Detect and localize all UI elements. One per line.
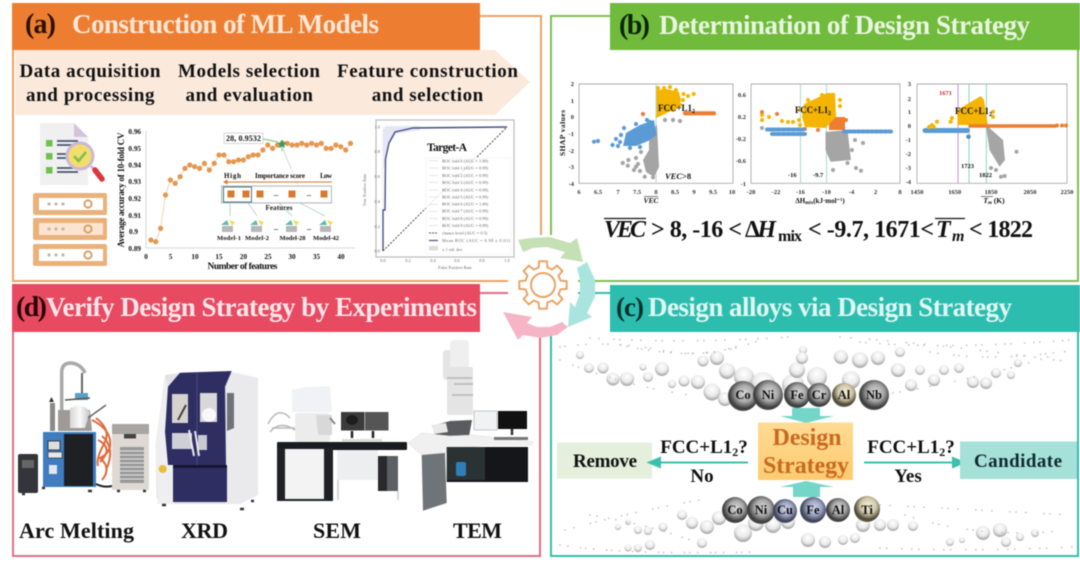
top element spheres: Co [735, 388, 751, 402]
design strategy box: Design [772, 425, 842, 451]
chart: SHAP vs VEC: FCC+L1 [658, 103, 692, 113]
step: data acquisition: and processing [26, 85, 155, 106]
icon: document with magnifier [40, 123, 102, 185]
chart: SHAP vs Tm: 1822 [979, 172, 992, 179]
chart: SHAP vs VEC [558, 81, 735, 205]
y tick labels [128, 128, 141, 253]
panel a process chevron band [15, 50, 530, 115]
chart: SHAP vs Tm: 2 [989, 112, 992, 118]
panel d heading [12, 284, 480, 332]
panel a heading: (a) [25, 9, 56, 40]
ROC axis labels: 1.0 [504, 258, 511, 263]
top element spheres: Nb [866, 388, 882, 402]
design strategy box [758, 422, 853, 480]
chart: SHAP vs delta H mix: -10 [822, 189, 831, 196]
ROC legend: ROC fold 0 (AUC = 1.00) [442, 158, 489, 163]
ROC axis labels: True Positive Rate [362, 174, 367, 206]
chart: SHAP vs delta H mix: -4 [849, 189, 855, 196]
chart: SHAP vs VEC: 8 [654, 189, 658, 196]
ROC title: Target-A [427, 142, 468, 154]
chart: SHAP vs delta H mix: 0.2 [738, 114, 746, 121]
chart: SHAP vs VEC: 6.5 [594, 189, 603, 196]
bottom element spheres [722, 496, 880, 524]
mean ROC line [383, 127, 507, 251]
ROC axis labels: 1.0 [374, 124, 381, 130]
label: Arc Melting: Arc Melting [19, 518, 134, 543]
panel d heading: (d) [16, 292, 47, 323]
chart: SHAP vs VEC: SHAP values [558, 110, 567, 156]
inset: feature importance diagram: ... [307, 192, 312, 198]
design strategy formula: > 8, -16 < [651, 217, 742, 243]
y tick labels: 0.93 [128, 178, 141, 186]
design strategy formula: m [952, 228, 964, 245]
top element spheres [728, 380, 889, 411]
chart: SHAP vs Tm: 1850 [984, 189, 998, 196]
ROC axis labels: 0.0 [374, 248, 381, 254]
top element spheres: Ni [762, 388, 775, 402]
inset: feature importance diagram: Model-2 [245, 235, 269, 242]
panel c heading: Design alloys via Design Strategy [648, 292, 1012, 322]
label: XRD: XRD [181, 518, 228, 543]
panel a frame [13, 16, 541, 281]
chart: SHAP vs Tm: -1 [906, 137, 911, 144]
x tick labels [144, 253, 345, 261]
chart: SHAP vs delta H mix: -1 [741, 181, 746, 188]
x tick labels: 15 [215, 253, 223, 261]
panel b heading: Determination of Design Strategy [659, 10, 1030, 40]
chart: SHAP vs VEC: VEC>8 [665, 171, 691, 181]
top element spheres: Fe [790, 388, 804, 402]
accuracy curve [151, 143, 350, 242]
y tick labels: 0.96 [128, 128, 141, 136]
design strategy formula: < -9.7, 1671< [808, 217, 934, 243]
remove box: Remove [573, 451, 637, 472]
design strategy formula [604, 217, 1033, 245]
arrow: no to remove [649, 458, 748, 467]
chart: SHAP vs delta H mix: 2 [874, 189, 877, 196]
icon: server stack [33, 193, 107, 266]
chart: SHAP vs delta H mix: -0.2 [736, 136, 746, 143]
ROC axis labels: 0.6 [454, 258, 461, 263]
design strategy formula: mix [778, 228, 802, 245]
x tick labels: 25 [264, 253, 272, 261]
chart: SHAP vs VEC: -3 [569, 164, 575, 171]
step: feature construction [337, 61, 518, 106]
panel b heading: (b) [619, 10, 650, 41]
chart: SHAP vs Tm: -2 [906, 151, 911, 158]
background bubbles: top [576, 346, 1022, 406]
chart: SHAP vs Tm [906, 81, 1074, 206]
chart: SHAP vs delta H mix: 2 [828, 111, 831, 117]
chart: SHAP vs VEC: 6 [577, 189, 581, 196]
x tick labels: 10 [191, 253, 199, 261]
inset: feature importance diagram: Model-1 [217, 235, 241, 242]
y axis label: Average accuracy of 10-fold CV [116, 132, 126, 248]
panel d: verify design strategy by experiments [12, 284, 540, 556]
top element spheres: Cr [812, 388, 827, 402]
label: FCC+L12? no [660, 437, 748, 487]
chart: SHAP vs delta H mix: 0.6 [738, 92, 747, 99]
peak marker: 28, 0.9532: 28, 0.9532 [226, 134, 261, 143]
chart: SHAP vs VEC: 0 [571, 114, 574, 121]
ROC legend [426, 158, 511, 254]
inset: feature importance diagram: Low [320, 172, 333, 180]
chart: SHAP vs VEC: VEC [643, 196, 659, 205]
chart: SHAP vs Tm: 2250 [1060, 189, 1074, 196]
ROC axis labels: 0.6 [374, 174, 381, 179]
ROC axis labels: 0.2 [405, 258, 411, 263]
panel a heading [12, 3, 480, 50]
chart: SHAP vs Tm: 0 [908, 123, 911, 130]
panel b frame [551, 16, 1078, 281]
arrow: pink cycle [503, 312, 568, 340]
equipment: XRD [156, 371, 258, 509]
inset: feature importance diagram: Model-28 [280, 235, 306, 242]
chart: SHAP vs delta H mix: -9.7 [813, 172, 824, 179]
ROC legend: ROC fold 6 (AUC = 1.00) [442, 202, 489, 207]
inset: feature importance diagram: ... [307, 226, 312, 232]
y tick labels: 0.89 [128, 245, 141, 253]
chart: SHAP vs VEC: 2 [692, 109, 695, 115]
chart: SHAP vs delta H mix: -0.6 [736, 158, 747, 165]
remove box [557, 442, 652, 478]
label: FCC+L12? yes: Yes [894, 466, 922, 487]
x tick labels: 20 [240, 253, 248, 261]
step: data acquisition [20, 61, 161, 106]
panel c: design alloys via design strategy [551, 285, 1080, 556]
chart: SHAP vs Tm: 1450 [910, 189, 924, 196]
ROC legend: ROC fold 3 (AUC = 0.99) [442, 180, 489, 185]
chart: SHAP vs delta H mix: ΔH [795, 197, 805, 205]
inset: feature importance diagram [217, 149, 339, 244]
line chart: accuracy vs number of features [116, 128, 355, 272]
bottom element spheres: Co [727, 503, 743, 517]
chart: SHAP vs Tm: -4 [906, 179, 912, 186]
label: FCC+L12? yes: ? [945, 437, 955, 458]
ROC legend: ROC fold 2 (AUC = 0.99) [442, 173, 489, 178]
chart: SHAP vs Tm: -3 [906, 165, 912, 172]
step: models selection: Models selection [178, 61, 320, 82]
ROC axis labels: 0.0 [380, 258, 387, 263]
chance line [383, 127, 507, 251]
ROC legend: Mean ROC (AUC = 0.98 ± 0.01) [442, 238, 511, 243]
chart: SHAP vs Tm: 2050 [1024, 189, 1036, 196]
candidate box [960, 442, 1077, 479]
arrow: teal cycle [568, 262, 595, 327]
arrow: bottom input to design strategy [780, 481, 834, 497]
icon: gear [519, 261, 567, 309]
inset: feature importance diagram: ... [274, 226, 279, 232]
ROC axis labels [362, 124, 511, 270]
chart: SHAP vs VEC: 7.5 [633, 189, 642, 196]
label: FCC+L12? yes [867, 437, 955, 487]
chart: SHAP vs VEC: 7 [616, 189, 620, 196]
x axis label: Number of features [208, 262, 278, 272]
panel b heading [610, 3, 1080, 50]
bottom element spheres: Ni [755, 503, 768, 517]
chart: SHAP vs delta H mix: -16 [788, 172, 797, 179]
ROC axis labels: 0.4 [430, 258, 437, 263]
chart: SHAP vs VEC: -2 [569, 148, 574, 155]
chart: SHAP vs VEC: 9 [692, 189, 696, 196]
chart: SHAP vs Tm: 3 [908, 81, 912, 88]
chart: SHAP vs delta H mix: -16 [796, 189, 806, 196]
chart: SHAP vs Tm: FCC+L1 [955, 106, 989, 116]
design strategy formula: T [936, 217, 952, 243]
design strategy box: Strategy [763, 453, 849, 479]
chart: SHAP vs VEC: 1 [571, 98, 574, 105]
bottom element spheres: Fe [806, 503, 820, 517]
ROC axis labels: 0.4 [374, 199, 381, 204]
std band [383, 126, 420, 251]
step: data acquisition: Data acquisition [20, 61, 161, 82]
ROC legend: ROC fold 4 (AUC = 0.99) [442, 187, 489, 192]
panel d frame [13, 293, 540, 556]
ROC legend: ROC fold 7 (AUC = 0.99) [442, 209, 489, 214]
inset: feature importance diagram: Importance score [255, 172, 305, 180]
inset: feature importance diagram: ... [274, 192, 279, 198]
chart: SHAP vs delta H mix: 8 [898, 189, 902, 196]
chart: SHAP vs VEC: -4 [569, 181, 575, 188]
label: FCC+L12? no: FCC+L1 [660, 437, 732, 458]
step: feature construction: and selection [372, 85, 484, 106]
peak marker: 28, 0.9532 [224, 133, 286, 151]
chart: SHAP vs Tm: 1671 [939, 90, 952, 97]
ROC axis labels: 0.8 [479, 258, 486, 263]
y tick labels: 0.94 [128, 162, 141, 170]
panel a heading: Construction of ML Models [72, 9, 379, 39]
ROC legend: ROC fold 8 (AUC = 0.99) [442, 216, 489, 221]
ROC legend: ROC fold 9 (AUC = 0.99) [442, 223, 489, 228]
panel b: determination of design strategy [551, 3, 1080, 281]
chart: SHAP vs Tm: 1650 [948, 189, 961, 196]
chart: SHAP vs delta H mix: -28 [747, 189, 756, 196]
chart: SHAP vs delta H mix [736, 84, 902, 206]
chart: SHAP vs delta H mix: mix [805, 201, 814, 206]
label: SEM: SEM [313, 518, 361, 543]
equipment: TEM [408, 340, 533, 511]
top element spheres: Al [838, 388, 851, 402]
x tick labels: 30 [288, 253, 296, 261]
background bubbles: bottom [615, 510, 1039, 552]
inset: feature importance diagram: Model-42 [313, 235, 339, 242]
chart: SHAP vs delta H mix: FCC+L1 [795, 105, 828, 115]
label: FCC+L12? no: No [690, 466, 714, 487]
bottom element spheres: Al [832, 503, 845, 517]
bottom element spheres: Ti [861, 503, 873, 517]
chart: SHAP vs VEC: 8.5 [671, 189, 680, 196]
y tick labels: 0.91 [128, 212, 141, 220]
ROC legend: ROC fold 5 (AUC = 0.99) [442, 194, 489, 199]
equipment: arc melting [18, 363, 149, 494]
ROC legend: chance level (AUC = 0.5) [442, 230, 488, 235]
label: FCC+L12? no: 2 [732, 445, 738, 459]
step: models selection [178, 61, 320, 106]
chart: SHAP vs VEC: 9.5 [709, 189, 718, 196]
step: feature construction: Feature construction [337, 61, 518, 82]
equipment: SEM [268, 386, 407, 501]
ROC legend: ± 1 std. dev. [442, 247, 463, 252]
panel c heading [610, 285, 1080, 332]
chart: SHAP vs delta H mix: (kJ·mol⁻¹) [813, 197, 845, 205]
x tick labels: 5 [169, 253, 173, 261]
arrow: yes to candidate [864, 458, 964, 467]
y tick labels: 0.9 [129, 228, 138, 236]
label: FCC+L12? yes: 2 [939, 445, 945, 459]
label: FCC+L12? no: ? [738, 437, 748, 458]
label: FCC+L12? yes: FCC+L1 [867, 437, 939, 458]
inset: feature importance diagram: High [224, 172, 241, 180]
bottom element spheres: Cu [777, 503, 793, 517]
chart: SHAP vs Tm: 2 [908, 96, 911, 103]
panel a: construction of ML models [12, 3, 541, 281]
ROC chart: Target-A [362, 120, 514, 270]
chart: SHAP vs Tm: 1723 [961, 163, 975, 170]
arrow: top input to design strategy [780, 408, 834, 423]
panel c frame [551, 293, 1078, 556]
chart: SHAP vs VEC: 2 [571, 81, 574, 88]
step: models selection: and evaluation [186, 85, 313, 106]
ROC axis labels: 0.8 [374, 149, 381, 154]
background specks [560, 337, 1072, 553]
chart: SHAP vs VEC: 10 [729, 189, 735, 196]
chart: SHAP vs Tm: 1 [908, 109, 911, 116]
chart: SHAP vs Tm: T [983, 196, 988, 205]
candidate box: Candidate [974, 451, 1062, 472]
y tick labels: 0.92 [128, 195, 141, 203]
ROC legend: ROC fold 1 (AUC = 0.99) [442, 165, 489, 170]
ROC axis labels: False Positive Rate [438, 265, 472, 270]
x tick labels: 40 [337, 253, 345, 261]
panel d heading: Verify Design Strategy by Experiments [46, 292, 477, 322]
y tick labels: 0.95 [128, 145, 141, 153]
panel c heading: (c) [616, 292, 644, 322]
chart: SHAP vs Tm: m [988, 201, 992, 206]
chart: SHAP vs delta H mix: -22 [772, 189, 780, 196]
x tick labels: 35 [313, 253, 320, 261]
arrow: green cycle [518, 237, 583, 262]
design strategy formula: VEC [604, 217, 647, 243]
x tick labels: 0 [144, 253, 148, 261]
label: TEM: TEM [453, 518, 502, 543]
ROC axis labels: 0.2 [374, 224, 380, 229]
chart: SHAP vs Tm: (K) [992, 196, 1005, 205]
center cycle: gear and arrows [503, 237, 595, 340]
design strategy formula: ΔH [745, 217, 777, 243]
design strategy formula: < 1822 [969, 217, 1033, 243]
inset: feature importance diagram: Features [266, 204, 293, 212]
chart: SHAP vs VEC: -1 [569, 131, 574, 138]
